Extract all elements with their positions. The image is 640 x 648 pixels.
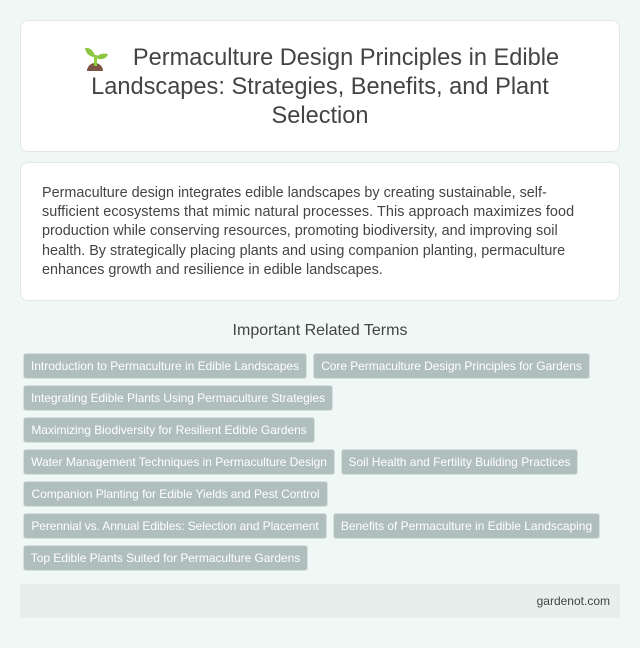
tag: Core Permaculture Design Principles for Gardens — [321, 359, 582, 373]
text block: intro paragraph: sufficient ecosystems that mimic natural processes. This approach maximizes food — [42, 204, 574, 220]
panel: title card — [20, 20, 620, 152]
tag — [23, 545, 308, 571]
icon: seedling — [85, 48, 108, 71]
tag: Perennial vs. Annual Edibles: Selection and Placement — [31, 519, 319, 533]
tag — [23, 513, 327, 539]
title: Selection — [271, 103, 369, 129]
tag: Benefits of Permaculture in Edible Landscaping — [341, 519, 592, 533]
title: Permaculture Design Principles in Edible — [133, 45, 559, 71]
text block: intro paragraph: health. By strategically placing plants and using companion planting, permaculture — [42, 243, 565, 259]
tag: Water Management Techniques in Permaculture Design — [31, 455, 327, 469]
tag — [313, 353, 590, 379]
heading: related terms: Important Related Terms — [233, 322, 407, 339]
tag: Integrating Edible Plants Using Permaculture Strategies — [31, 391, 325, 405]
tag — [23, 481, 328, 507]
text block: intro paragraph — [42, 185, 574, 278]
title — [91, 45, 559, 129]
tag: Companion Planting for Edible Yields and Pest Control — [31, 487, 320, 501]
tag: Soil Health and Fertility Building Practices — [348, 455, 571, 469]
footer source text: gardenot.com — [537, 594, 610, 608]
tag — [23, 417, 315, 443]
title: Landscapes: Strategies, Benefits, and Plant — [91, 74, 549, 100]
tag — [341, 449, 578, 475]
text block: intro paragraph: enhances growth and resilience in edible landscapes. — [42, 262, 383, 278]
tag: Introduction to Permaculture in Edible Landscapes — [31, 359, 299, 373]
tag list — [23, 353, 600, 571]
tag: Top Edible Plants Suited for Permaculture Gardens — [31, 551, 300, 565]
text block: intro paragraph: Permaculture design integrates edible landscapes by creating sustainable, self- — [42, 185, 547, 201]
text block: intro paragraph: production while conserving resources, promoting biodiversity, and improving soil — [42, 223, 558, 239]
tag — [23, 385, 333, 411]
tag: Maximizing Biodiversity for Resilient Edible Gardens — [31, 423, 307, 437]
footer bar — [20, 584, 620, 618]
tag — [23, 353, 307, 379]
tag — [333, 513, 600, 539]
panel: description — [20, 162, 620, 301]
tag — [23, 449, 335, 475]
